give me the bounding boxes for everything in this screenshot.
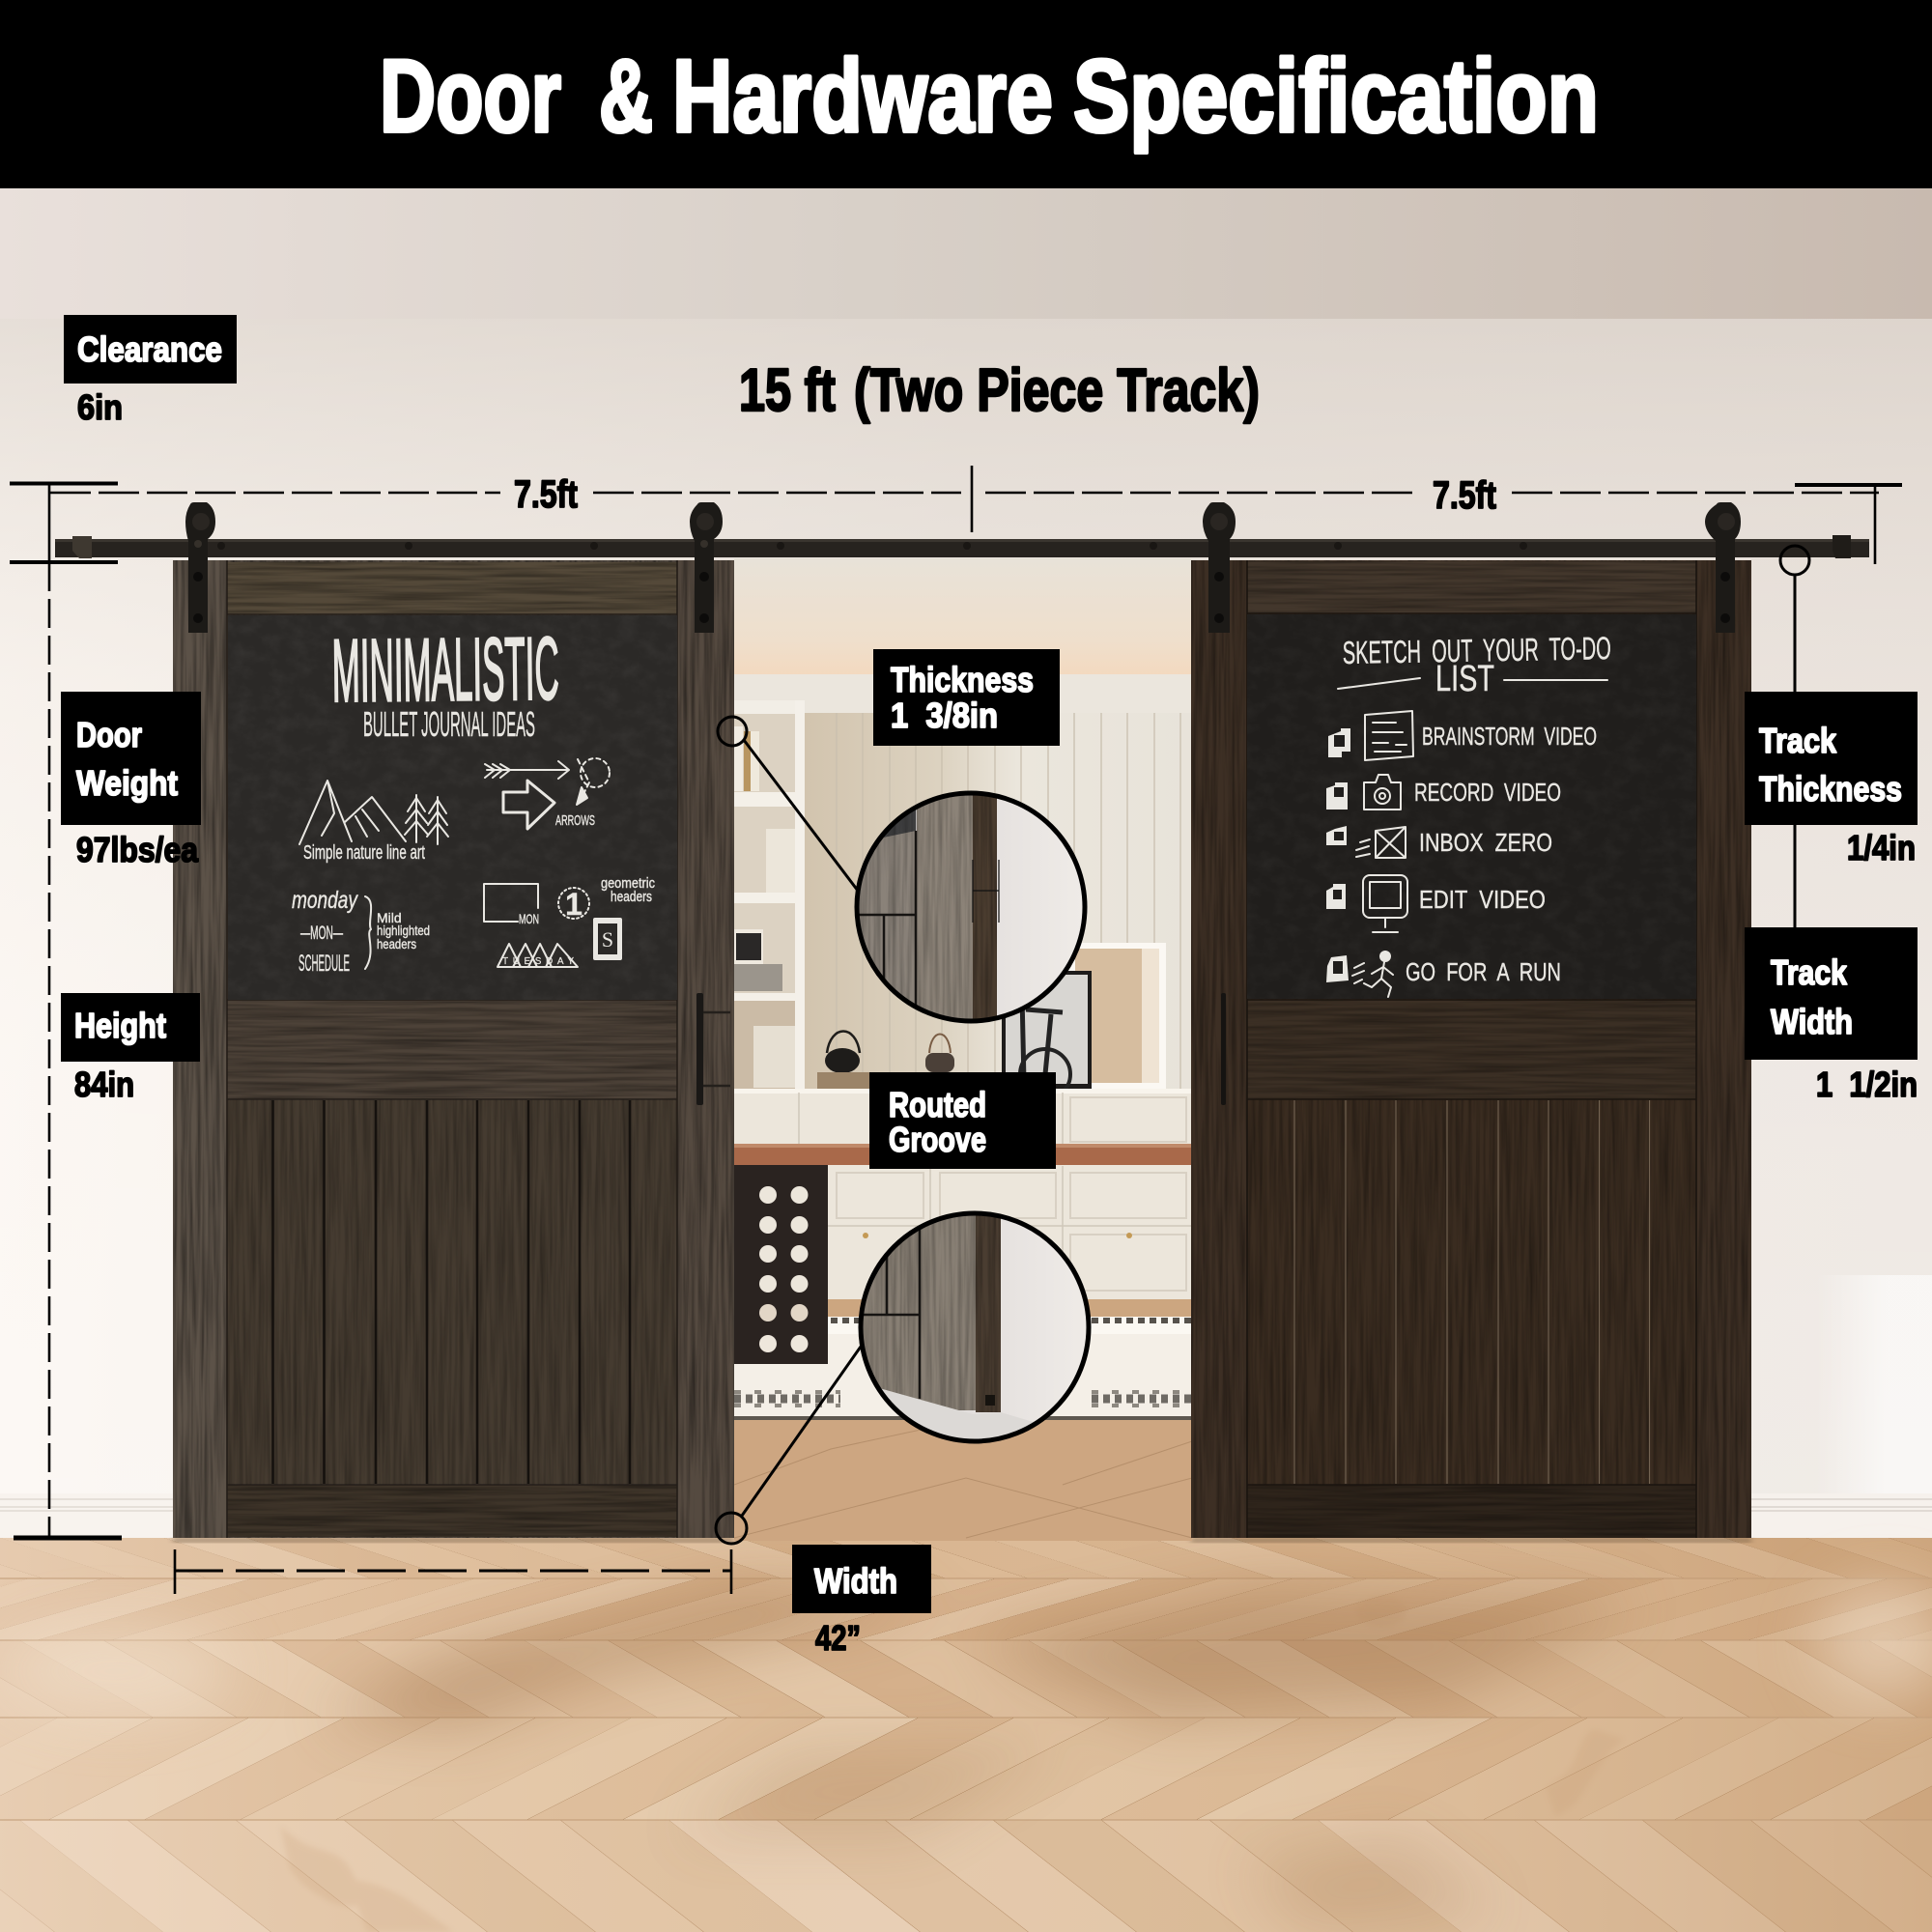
geometric headers doodles: headers <box>611 889 652 905</box>
track length heading: 15 ft <box>739 357 836 424</box>
black perforated table leg <box>734 1165 828 1364</box>
label: track width: 1 1/2in <box>1816 1065 1918 1104</box>
chalk list underline <box>1338 659 1607 699</box>
rug <box>734 1317 1192 1420</box>
schedule headers: headers <box>377 936 416 952</box>
title banner: & <box>599 38 653 154</box>
wall <box>0 319 1932 1541</box>
label: routed groove: Routed <box>889 1085 986 1124</box>
schedule headers: highlighted <box>377 923 430 938</box>
chalk list underline: LIST <box>1435 659 1494 699</box>
label: clearance: Clearance <box>77 329 222 369</box>
chalk heading: SKETCH OUT YOUR TO-DO <box>1342 630 1611 670</box>
label: door weight: Weight <box>76 763 178 803</box>
left door chalkboard: BULLET JOURNAL IDEAS <box>363 704 535 744</box>
right track stop <box>1833 535 1851 558</box>
label: door weight: Door <box>76 715 142 754</box>
drawers under counter <box>734 1164 1192 1299</box>
wood knots <box>280 1596 1623 1932</box>
barn door track <box>55 535 1869 558</box>
label: clearance <box>64 315 237 427</box>
height dimension line <box>10 483 122 1538</box>
left barn door <box>173 560 734 1538</box>
title banner: Door <box>380 38 561 154</box>
lower cabinets <box>734 1089 1192 1145</box>
label: routed groove: Groove <box>889 1120 986 1159</box>
list row: brainstorm video <box>1328 711 1597 760</box>
schedule headers: Mild <box>377 910 402 925</box>
track length heading: (Two Piece Track) <box>854 357 1260 424</box>
geometric headers doodles: geometric <box>601 875 655 892</box>
schedule headers: monday <box>292 887 358 914</box>
label: track width: Track <box>1771 952 1848 992</box>
hanger strap 3 <box>1203 502 1236 633</box>
list row: inbox zero <box>1326 826 1552 858</box>
track bolts <box>217 542 1527 550</box>
leader line: thickness callout <box>718 717 858 891</box>
floor shadows <box>319 1584 1642 1932</box>
label: track width: Width <box>1771 1002 1853 1041</box>
label: door weight: 97lbs/ea <box>76 830 199 869</box>
list row: record video: RECORD VIDEO <box>1414 778 1561 807</box>
mountain doodle <box>299 781 448 844</box>
top rail <box>1247 561 1696 613</box>
list row: record video <box>1326 775 1561 810</box>
arrows caption: ARROWS <box>555 812 595 829</box>
right barn door <box>1191 560 1751 1538</box>
label: thickness: 1 3/8in <box>891 696 998 735</box>
track length heading <box>739 357 1260 424</box>
geometric headers doodles: S <box>602 927 613 952</box>
baseboard left <box>0 1493 174 1539</box>
framed bicycle photo <box>1002 971 1092 1099</box>
door shadow on floor <box>173 1538 1751 1543</box>
room interior seen between doors <box>734 558 1192 1541</box>
geometric headers doodles: 1 <box>565 887 582 922</box>
leader line: routed groove callout <box>716 1347 861 1544</box>
framed art <box>1069 943 1166 1089</box>
label: track width <box>1745 927 1918 1104</box>
plank panel <box>1247 1100 1696 1484</box>
detail circle: thickness <box>850 787 1092 1029</box>
plank panel <box>227 1100 677 1484</box>
right door handle <box>1221 993 1226 1105</box>
detail circle: routed groove <box>855 1208 1096 1449</box>
label: thickness: Thickness <box>891 660 1034 699</box>
hanger strap 4 <box>1705 502 1741 633</box>
left door chalkboard: MINIMALISTIC <box>331 620 559 721</box>
right stile <box>677 560 733 1538</box>
title banner: Specification <box>1073 38 1599 154</box>
kettle <box>817 1032 873 1089</box>
label: width: Width <box>814 1561 897 1601</box>
label: width: 42” <box>815 1618 861 1658</box>
15 ft top dimension lines <box>50 466 1902 564</box>
label: track thickness <box>1745 692 1918 867</box>
left door chalkboard <box>228 615 677 1000</box>
left stile <box>173 560 227 1538</box>
geometric headers doodles: TUESDAY <box>502 956 574 967</box>
floor in front of room <box>734 1420 1192 1541</box>
label: height <box>61 993 200 1104</box>
schedule headers: —MON— <box>300 923 343 944</box>
hanger strap 1 <box>185 502 215 633</box>
schedule headers <box>292 887 430 977</box>
left door handle <box>696 993 730 1105</box>
shelf unit <box>734 700 805 1092</box>
label: width <box>792 1545 931 1658</box>
label: 7.5ft right: 7.5ft <box>1433 474 1496 517</box>
label: height: 84in <box>74 1065 134 1104</box>
label: door weight <box>61 692 201 869</box>
label: routed groove <box>869 1072 1056 1169</box>
schedule headers: SCHEDULE <box>298 951 350 977</box>
middle rail <box>227 1000 677 1099</box>
label: track thickness: 1/4in <box>1847 828 1916 867</box>
label: clearance: 6in <box>77 387 123 427</box>
nature caption: Simple nature line art <box>303 842 425 864</box>
room ceiling <box>734 558 1192 676</box>
ceiling band <box>0 188 1932 319</box>
list row: inbox zero: INBOX ZERO <box>1419 828 1552 857</box>
track ring and leader <box>1780 546 1809 929</box>
floor glow <box>0 1584 1932 1715</box>
herringbone floor <box>0 1538 1932 1932</box>
panelled back wall <box>804 713 1192 1092</box>
list row: edit video <box>1326 875 1546 932</box>
geometric headers doodles <box>484 875 655 967</box>
crown moulding <box>734 674 1192 713</box>
baseboard right <box>1750 1493 1932 1539</box>
arrow doodles <box>485 758 610 829</box>
right door chalkboard <box>1247 614 1696 999</box>
list row: edit video: EDIT VIDEO <box>1419 885 1546 914</box>
width dimension line <box>175 1549 731 1594</box>
wood countertop <box>734 1144 1192 1165</box>
geometric headers doodles: MON <box>519 911 539 926</box>
bottom rail <box>227 1485 677 1537</box>
bottom rail <box>1247 1485 1696 1538</box>
title banner <box>0 0 1932 188</box>
left track stop <box>72 536 92 558</box>
top rail <box>227 562 677 614</box>
label: thickness <box>873 649 1060 746</box>
label: track thickness: Thickness <box>1759 769 1902 809</box>
list row: go for a run <box>1326 951 1561 997</box>
label: track thickness: Track <box>1759 721 1837 760</box>
room floor <box>734 1299 1192 1319</box>
teapot <box>925 1034 954 1072</box>
middle rail <box>1247 1000 1696 1099</box>
title banner: Hardware <box>672 38 1053 154</box>
label: 7.5ft left: 7.5ft <box>514 473 578 516</box>
list row: go for a run: GO FOR A RUN <box>1406 957 1561 986</box>
hanger strap 2 <box>690 502 723 633</box>
list row: brainstorm video: BRAINSTORM VIDEO <box>1422 722 1597 751</box>
label: height: Height <box>74 1006 166 1045</box>
